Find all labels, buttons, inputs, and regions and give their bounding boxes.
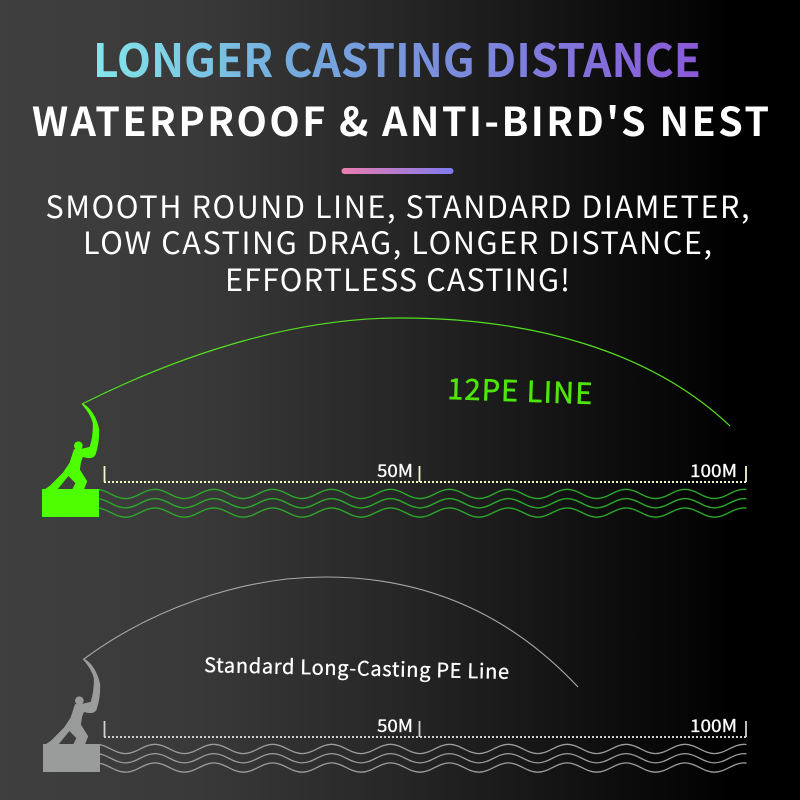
distance scale: standard: [104, 713, 746, 738]
icon: grey angler on platform: [43, 659, 100, 772]
divider bar: [342, 168, 454, 174]
casting arc: 12PE: [82, 318, 730, 426]
title: LONGER CASTING DISTANCE: [93, 25, 701, 91]
icon: green angler on platform: [42, 404, 99, 517]
distance scale: standard: 100M: [690, 713, 737, 738]
distance scale: 12PE: [104, 458, 746, 483]
casting arc: standard: [84, 577, 578, 687]
description text: LOW CASTING DRAG, LONGER DISTANCE,: [83, 219, 712, 263]
description text: EFFORTLESS CASTING!: [225, 256, 570, 300]
panel: standard PE line casting diagram: [43, 577, 800, 772]
description text: SMOOTH ROUND LINE, STANDARD DIAMETER,: [46, 183, 750, 227]
water waves: 12PE: [96, 489, 800, 517]
label: Standard Long-Casting PE Line: Standard Long-Casting PE Line: [204, 649, 509, 685]
distance scale: 12PE: 100M: [690, 458, 737, 483]
distance scale: 12PE: 50M: [377, 458, 413, 483]
label: 12PE LINE: 12PE LINE: [447, 366, 593, 413]
distance scale: standard: 50M: [377, 713, 413, 738]
panel: 12PE line casting diagram: [42, 318, 800, 517]
water waves: standard: [96, 744, 800, 772]
subtitle: WATERPROOF & ANTI-BIRD'S NEST: [32, 91, 769, 148]
description text: [46, 183, 750, 300]
